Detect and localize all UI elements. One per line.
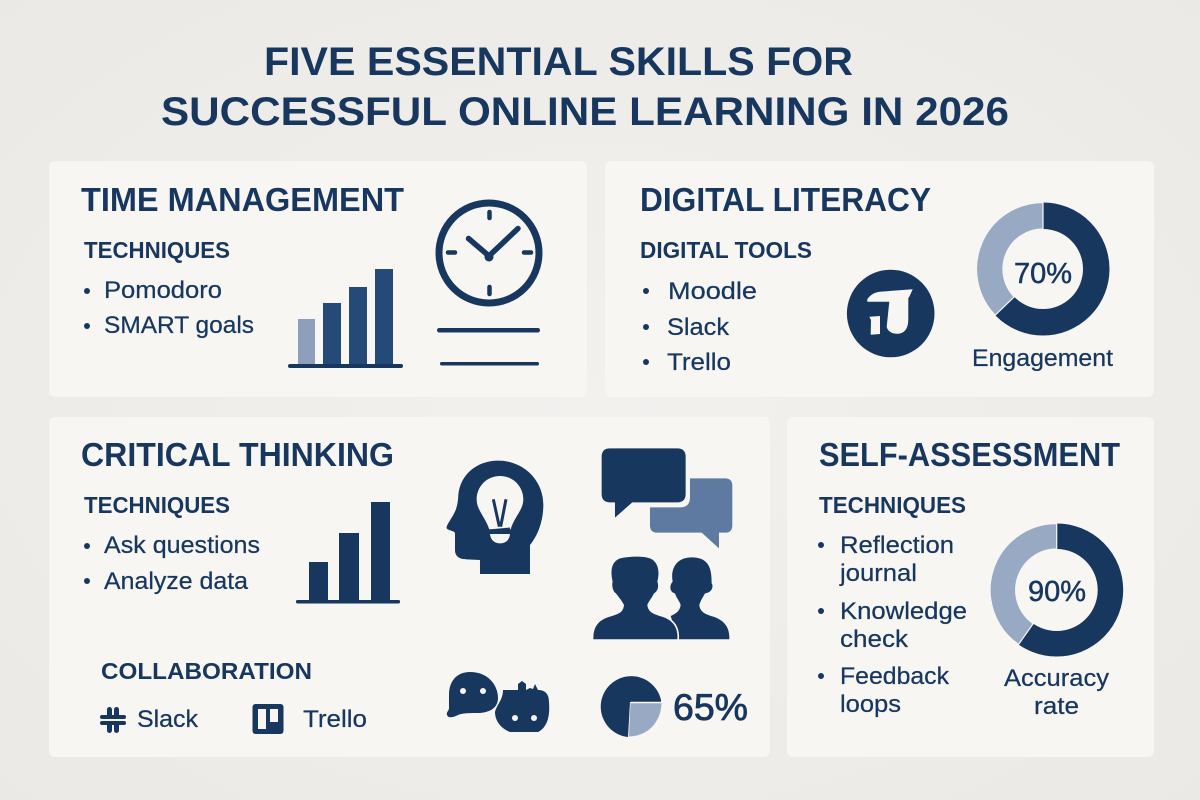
label: accuracy rate: rate	[1034, 693, 1079, 720]
list: techniques: Pomodoro	[104, 277, 222, 304]
icon: slack logo	[100, 707, 126, 733]
heading: time management: TIME MANAGEMENT	[81, 181, 404, 218]
label: accuracy rate: Accuracy	[1004, 665, 1109, 692]
title: SUCCESSFUL ONLINE LEARNING IN 2026	[161, 90, 1009, 134]
donut chart: 90% accuracy rate	[990, 523, 1110, 644]
list: techniques: check	[840, 626, 909, 653]
label: 65%: 65%	[673, 687, 748, 728]
heading: critical thinking: CRITICAL THINKING	[81, 436, 394, 473]
label: slack: Slack	[137, 706, 199, 733]
panel: time management	[49, 161, 587, 397]
subheading: techniques: TECHNIQUES	[819, 492, 966, 518]
list: techniques: Knowledge	[840, 598, 967, 625]
icon: two people	[593, 557, 729, 639]
donut chart: 70% engagement: 70%	[1014, 258, 1072, 290]
pie chart: 65%	[601, 676, 662, 737]
list: techniques	[818, 532, 967, 718]
list: techniques: loops	[840, 691, 901, 718]
heading: digital literacy: DIGITAL LITERACY	[640, 181, 931, 218]
icon: circular app logo	[847, 270, 934, 357]
list: techniques: Feedback	[840, 663, 950, 690]
bar chart: rising bars	[288, 269, 403, 368]
list: techniques: Ask questions	[104, 532, 260, 559]
label: trello: Trello	[303, 706, 367, 733]
list: techniques: Reflection	[840, 532, 954, 559]
title: FIVE ESSENTIAL SKILLS FOR	[264, 40, 853, 84]
icon: head with lightbulb	[447, 461, 543, 574]
list: techniques: Analyze data	[104, 568, 249, 595]
donut chart: 90% accuracy rate: 90%	[1028, 576, 1086, 608]
heading: self-assessment: SELF-ASSESSMENT	[819, 436, 1120, 473]
panel: self-assessment	[787, 417, 1154, 757]
label: accuracy rate	[1004, 665, 1109, 720]
title	[161, 40, 1009, 134]
icon: text lines	[437, 328, 540, 366]
label: engagement: Engagement	[972, 345, 1113, 372]
list: digital tools: Trello	[667, 349, 731, 376]
subheading: techniques: TECHNIQUES	[84, 492, 230, 518]
list: digital tools: Moodle	[668, 278, 757, 305]
list: techniques: journal	[839, 560, 917, 587]
panel: digital literacy	[605, 161, 1154, 397]
list: digital tools: Slack	[667, 314, 730, 341]
bar chart: critical thinking	[296, 502, 400, 604]
subheading: collaboration: COLLABORATION	[101, 658, 312, 684]
subheading: techniques: TECHNIQUES	[84, 237, 230, 263]
donut chart: 70% engagement	[977, 202, 1096, 322]
list: techniques: SMART goals	[104, 312, 254, 339]
panel: critical thinking and collaboration	[49, 417, 770, 757]
list: techniques	[84, 277, 254, 339]
icon: trello logo	[252, 704, 284, 734]
subheading: digital tools: DIGITAL TOOLS	[640, 237, 812, 263]
icon: clock	[439, 203, 539, 303]
list: digital tools	[643, 278, 757, 376]
icon: chat bots	[447, 672, 549, 732]
list: techniques	[84, 532, 260, 595]
icon: speech bubbles	[602, 448, 732, 548]
